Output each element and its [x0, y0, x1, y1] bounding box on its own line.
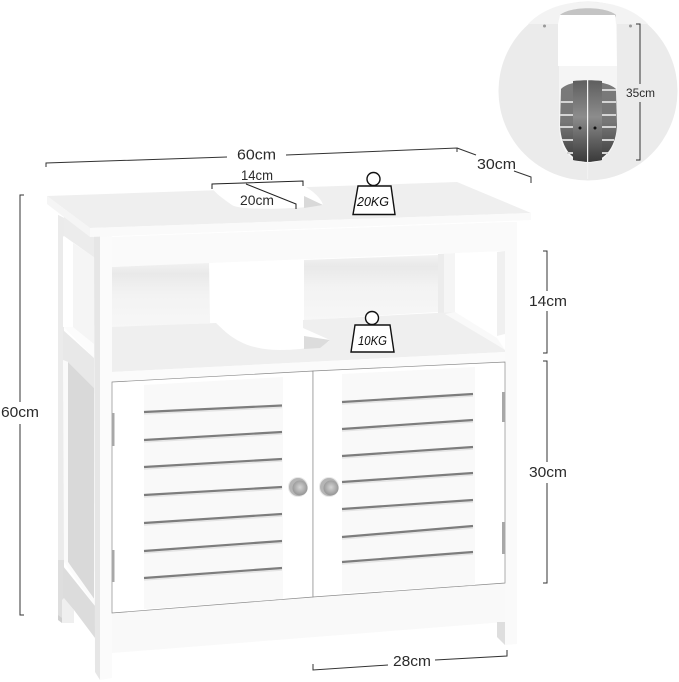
apron	[112, 222, 507, 267]
back post	[438, 253, 455, 313]
back foot	[62, 598, 74, 623]
back wall right	[304, 255, 438, 320]
dimension: 20cm cutout: 20cm	[240, 192, 274, 208]
left door	[112, 371, 313, 613]
dimension: 30cm height	[529, 361, 567, 583]
dimension: 14cm cutout: 14cm	[241, 167, 273, 183]
right inner leg	[497, 251, 505, 336]
dimension: 60cm width: 60cm	[237, 146, 276, 164]
dimension: 28cm bottom	[313, 650, 507, 670]
inset opening	[559, 24, 617, 163]
inset cabinet interior	[560, 82, 617, 162]
weight icon: 20KG	[353, 172, 395, 214]
louvres	[144, 406, 282, 580]
left side frame	[58, 215, 95, 638]
sink cutout	[212, 184, 323, 209]
dimension: 14cm height: 14cm	[529, 293, 567, 310]
side upper rail	[64, 217, 95, 258]
right door	[313, 362, 505, 597]
side mid rail	[63, 330, 94, 388]
base rail	[112, 583, 505, 653]
inset circle: cutout height detail	[498, 2, 678, 180]
dimension: 20cm cutout	[240, 184, 296, 209]
dimension: 14cm height	[529, 251, 567, 353]
louvres	[342, 394, 473, 564]
inset top band	[528, 2, 648, 24]
dimension: 30cm height: 30cm	[529, 464, 567, 481]
knobs	[288, 478, 338, 496]
dimension: 30cm depth: 30cm	[477, 156, 516, 173]
back leg	[58, 215, 74, 623]
side lower bevel	[64, 562, 95, 606]
side lower panel	[68, 362, 94, 604]
side window sill	[64, 327, 94, 358]
left front leg	[100, 236, 112, 680]
hinges	[502, 392, 505, 422]
dimension: 30cm depth	[457, 148, 531, 183]
right front leg	[505, 222, 517, 645]
dimension: 28cm bottom: 28cm	[393, 653, 431, 670]
dimension: 14cm cutout	[212, 167, 303, 189]
back wall left	[112, 262, 210, 328]
side window	[63, 236, 73, 327]
shelf front edge	[112, 352, 505, 382]
weight icon: 20KG: 20KG	[356, 194, 389, 209]
dimension: 35cm	[626, 24, 655, 160]
right foot	[497, 622, 505, 645]
cabinet	[47, 182, 531, 680]
side bottom rail	[63, 566, 95, 638]
weight icon: 10KG: 10KG	[358, 334, 387, 348]
hinges	[112, 413, 114, 446]
dimension: 60cm width	[46, 146, 457, 167]
dimension: 60cm height	[1, 195, 39, 615]
dimension: 60cm height: 60cm	[1, 404, 39, 421]
weight icon: 10KG	[351, 312, 394, 352]
shelf	[112, 312, 505, 372]
dimension: 35cm: 35cm	[626, 88, 655, 100]
top board front edge	[90, 213, 531, 237]
top board surface	[47, 182, 531, 228]
